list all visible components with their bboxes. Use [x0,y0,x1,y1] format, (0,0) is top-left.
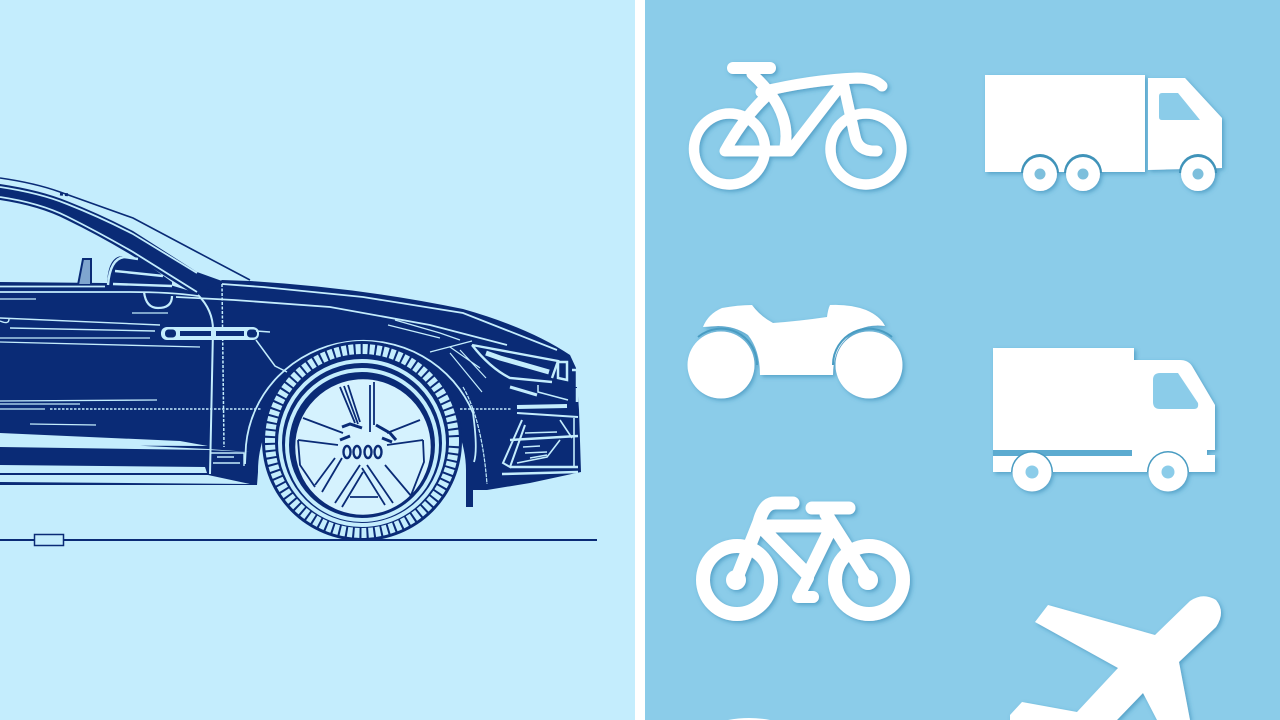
hood sketch strokes [388,320,486,392]
headlight [472,345,580,402]
windshield outer line [0,178,250,280]
lower intake [502,406,578,474]
divider [635,0,645,720]
ground marker [34,534,64,546]
roof clip dots [60,194,70,195]
rim [294,378,432,516]
roof pillar band [0,184,222,296]
icon: box truck one [985,75,1222,191]
icon: partial wheel at bottom edge [728,718,770,720]
panel: right background [645,0,1280,720]
illustration: car blueprint [0,178,597,546]
ground line [0,539,597,541]
side badge [161,327,287,372]
icon: bicycle two [703,503,903,614]
mirror post [78,259,91,285]
door handle [144,292,172,308]
pillar highlights [0,187,197,292]
panel: left background [0,0,635,720]
sill plate [211,453,244,466]
rear door handle [0,318,160,331]
sill stripes [0,433,250,484]
tire [262,341,462,541]
icon: bicycle one [694,68,902,184]
mirror highlights [108,257,172,286]
hub bolts [344,446,382,458]
icon: motorcycle [688,305,902,398]
icon: delivery truck [993,348,1215,492]
tire sidewall rings [280,361,444,525]
wheel arch line [245,341,476,464]
tire tread [270,349,454,533]
hub details [340,424,396,442]
car body [0,280,581,507]
door cut line [198,295,213,474]
dashed axis line [50,408,512,410]
spokes [298,382,424,507]
door seam dashed [222,284,224,447]
belt lines [0,284,557,350]
body creases [0,299,200,425]
front wheel [262,341,462,541]
icon: airplane [1010,596,1221,720]
fender line [463,387,487,484]
side mirror [107,256,172,287]
